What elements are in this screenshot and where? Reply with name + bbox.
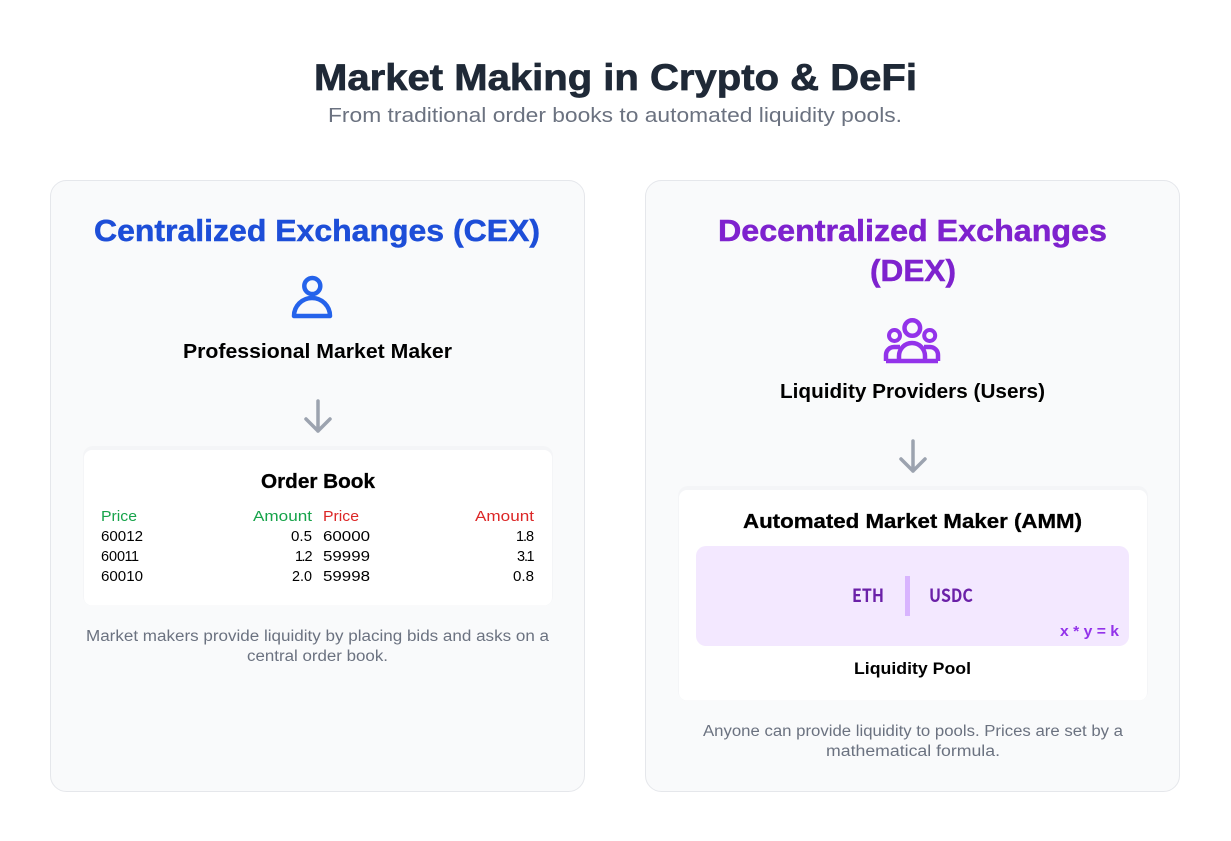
page header [314,57,917,127]
asks table: 60000 [323,529,370,545]
panel: centralized exchanges [50,180,584,792]
panel: decentralized exchanges [646,180,1180,792]
description [703,723,1123,760]
description: Market makers provide liquidity by placing bids and asks on a [86,628,549,645]
bids table: 60010 [101,569,143,585]
bids table: Amount [253,509,312,525]
pool divider [905,576,910,616]
order book card [83,446,553,606]
label: liquidity providers: Liquidity Providers (Users) [780,381,1045,403]
bids table [101,509,313,585]
asks table: 59999 [323,549,370,565]
formula: x * y = k [1060,623,1120,640]
panel heading: Decentralized Exchanges [718,214,1107,248]
panel heading [718,214,1107,288]
asks table: 0.8 [513,569,534,585]
card background [83,446,553,606]
description [86,628,549,665]
asks table: 59998 [323,569,370,585]
panel background [646,180,1180,792]
description: central order book. [247,648,388,665]
subtitle: From traditional order books to automated liquidity pools. [328,104,902,127]
asks table: Amount [475,509,534,525]
bids table: 1.2 [295,549,313,565]
bids table: 2.0 [292,569,312,585]
token: eth: ETH [852,582,884,608]
bids table: 60011 [101,549,139,565]
bids table: 0.5 [291,529,312,545]
liquidity pool label: Liquidity Pool [854,660,971,678]
asks table: 3.1 [517,549,535,565]
panel heading: Centralized Exchanges (CEX) [94,214,540,248]
label: professional market maker: Professional Market Maker [183,341,452,363]
amm heading: Automated Market Maker (AMM) [743,511,1082,533]
description: mathematical formula. [826,743,1000,760]
asks table [323,509,535,585]
bids table: 60012 [101,529,143,545]
asks table: Price [323,509,359,525]
amm card [678,486,1148,701]
card background [678,486,1148,701]
title: Market Making in Crypto & DeFi [314,57,917,98]
icon: users [886,320,938,361]
arrow: down to amm [901,441,925,471]
panel background [50,180,584,792]
order book heading: Order Book [261,471,376,493]
arrow: down to order book [306,401,330,431]
asks table: 1.8 [516,529,534,545]
token: usdc: USDC [929,582,973,608]
liquidity pool box [696,546,1129,646]
description: Anyone can provide liquidity to pools. Prices are set by a [703,723,1123,740]
bids table: Price [101,509,137,525]
panel heading: (DEX) [870,254,956,288]
icon: person [294,278,330,316]
